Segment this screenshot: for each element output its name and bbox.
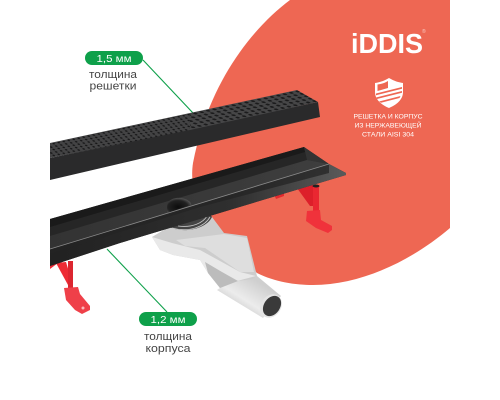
leader line: grate (143, 60, 193, 113)
channel tray (50, 147, 346, 266)
tray silhouette (50, 147, 346, 266)
grate top face right (190, 90, 318, 130)
back wall top shade (50, 147, 305, 227)
grate bar (50, 90, 320, 180)
label: grate thickness (85, 51, 143, 92)
drain hole (167, 198, 191, 213)
grate top face left (50, 113, 190, 158)
drain pipe (217, 276, 281, 318)
material text: ИЗ НЕРЖАВЕЮЩЕЙ (354, 120, 422, 130)
red bracket left (50, 261, 90, 314)
funnel body (152, 217, 257, 288)
leader line: body (107, 249, 167, 312)
red bracket right (274, 184, 332, 233)
flange (50, 164, 346, 266)
label: body thickness: корпуса (146, 343, 191, 355)
logo: IDDIS: ® (422, 28, 426, 35)
pill: 1,2 mm (139, 312, 197, 326)
tray floor (50, 160, 329, 249)
grate side face (50, 102, 320, 180)
caption: body: толщина (144, 331, 193, 343)
front rim highlight (50, 164, 329, 249)
material text: РЕШЕТКА И КОРПУС (354, 114, 423, 120)
tray right inner wall (304, 147, 329, 164)
front rim wall (50, 164, 329, 254)
label: body thickness: 1,2 мм (150, 314, 186, 326)
icon: shield (375, 78, 403, 108)
caption: grate: толщина (89, 69, 138, 81)
material text (354, 114, 423, 138)
logo: IDDIS: iDDIS (351, 28, 423, 59)
pill: 1,5 mm (85, 51, 143, 65)
material text: СТАЛИ AISI 304 (362, 132, 414, 138)
pipe opening (256, 290, 286, 322)
coral background shape (192, 0, 450, 285)
label: grate thickness: 1,5 мм (96, 53, 132, 65)
label: body thickness (139, 312, 197, 355)
label: grate thickness: решетки (90, 80, 136, 92)
drain seal rings (168, 208, 212, 230)
steel drain funnel (152, 208, 286, 322)
